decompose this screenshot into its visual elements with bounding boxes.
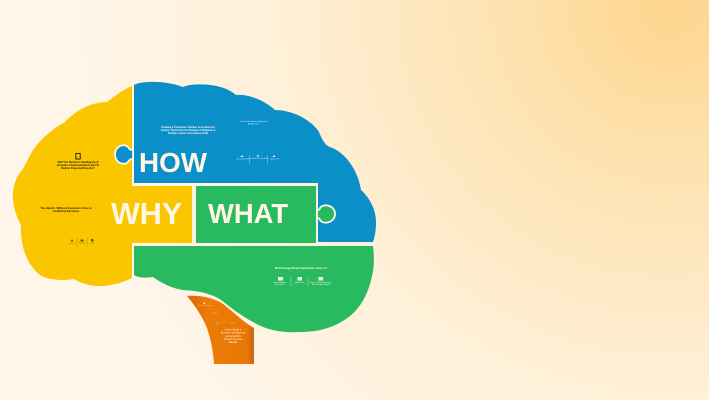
text: center of excellence	[240, 120, 268, 125]
text: why question: Deliver Expected Results?	[61, 166, 95, 170]
text: why question	[57, 154, 100, 170]
icon: clipboard	[76, 154, 80, 159]
text: center of excellence: Analytics CoE	[248, 122, 260, 125]
text: stem labels: Model	[215, 322, 220, 324]
icons: how row	[236, 154, 279, 164]
panel: how (blue)	[115, 82, 376, 242]
text: why question: WHY Do Business Intelligence &	[58, 160, 98, 164]
icon: stem top	[204, 302, 205, 304]
icons: what row: Analytics Team	[295, 281, 305, 284]
icons: how row: Executive Team Lead	[236, 158, 249, 160]
heading: what: WHAT	[208, 198, 288, 229]
text: stem heading: Shared Services	[223, 337, 243, 341]
text: what question: What Strategy Should Organizations Adopt to?	[275, 267, 328, 270]
text: stem heading	[221, 328, 246, 344]
icons: what row: Business Intelligence Analytics	[312, 283, 330, 286]
icons: how row: Business Unit	[270, 158, 279, 160]
icons: hazard row: Marketing	[79, 242, 85, 244]
text: how description: Breaking a Transaction: Flexible, Accessible and	[161, 126, 215, 129]
text: center of excellence: Center of Excellence Intelligence &	[240, 120, 268, 123]
text: stem heading: Business Intelligence	[221, 331, 246, 335]
text: stem labels: Team	[222, 322, 227, 324]
text: hazard	[40, 206, 92, 213]
text: how description: Analytic, Shared Services Business Intelligence &	[161, 129, 216, 132]
text: stem labels: Analytics	[212, 312, 218, 314]
icons: what row: Center of Excellence Shared Service	[310, 281, 332, 284]
icons: hazard row: Sales	[90, 242, 94, 244]
heading: why: WHY	[111, 197, 182, 231]
text: stem labels: Business Intelligence	[198, 304, 212, 307]
text: stem labels	[198, 304, 235, 324]
text: how description	[161, 126, 216, 135]
heading: how: HOW	[139, 147, 208, 178]
text: stem heading: and Analytics	[225, 334, 241, 338]
text: stem heading: Model	[229, 340, 237, 344]
icons: what row	[274, 277, 332, 286]
icon: green puzzle tab	[317, 205, 335, 223]
panel: why (yellow)	[13, 86, 192, 286]
panel: what (green)	[134, 186, 374, 332]
icon: blue puzzle tab	[115, 145, 133, 164]
text: how description: Analytics Center of Excellence (CoE)	[168, 132, 208, 135]
text: stem labels: Services	[229, 322, 235, 324]
icons: what row: Business Intelligence	[274, 281, 287, 284]
text: stem heading: How to Build a	[225, 328, 242, 332]
text: why question: Analytics Implementations Fail To	[57, 163, 100, 167]
panel: brain stem (orange)	[187, 296, 254, 364]
text: hazard: The Hazard - Different Functions Arrive at	[40, 206, 92, 210]
text: hazard: Conflicting Decisions	[53, 209, 80, 213]
icons: what row: Shared Services	[275, 283, 285, 286]
icons: hazard row	[70, 238, 94, 246]
icons: how row: Shared Services Center Model	[249, 157, 268, 160]
icons: hazard row: Finance	[70, 243, 75, 245]
